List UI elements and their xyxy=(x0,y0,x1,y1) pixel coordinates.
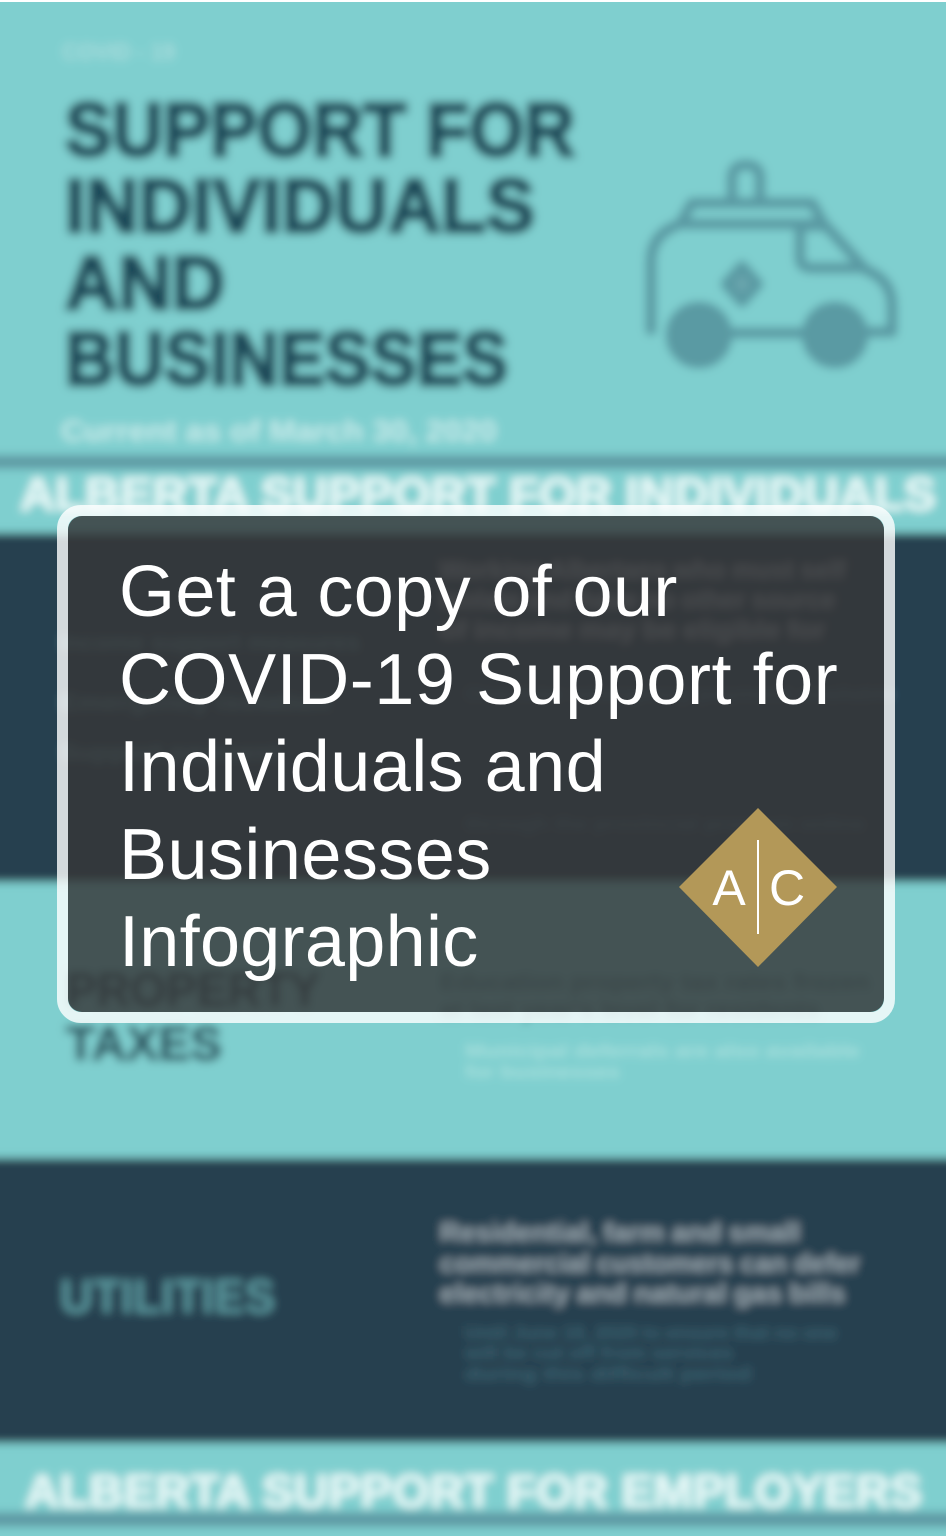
title: AND xyxy=(65,241,225,326)
right column body: isolate and have no other source xyxy=(440,587,835,614)
property taxes body: Education property tax rates frozen xyxy=(440,969,870,996)
property taxes details: Municipal deferrals are also available xyxy=(465,1041,860,1061)
utilities body: commercial customers can defer xyxy=(440,1248,860,1278)
property taxes body xyxy=(440,969,870,1024)
property taxes details xyxy=(465,1041,860,1082)
property taxes details: for businesses xyxy=(465,1062,620,1082)
utilities details: during this difficult period xyxy=(465,1364,751,1384)
utilities label: UTILITIES xyxy=(60,1271,275,1324)
date tag: COVID - 19 xyxy=(62,39,175,66)
left column label xyxy=(60,630,360,765)
property taxes label: PROPERTY xyxy=(66,964,320,1017)
property taxes label xyxy=(66,964,320,1071)
call to action text: COVID-19 Support for xyxy=(119,640,838,720)
call to action text: Businesses xyxy=(119,815,492,895)
right column body: of income may be eligible for xyxy=(440,617,825,644)
panel: navy utilities section xyxy=(0,1158,946,1443)
title: BUSINESSES xyxy=(65,317,508,402)
utilities body xyxy=(440,1217,860,1308)
call to action text: Individuals and xyxy=(119,727,606,807)
right column body xyxy=(440,557,846,644)
right column details: One-time emergency payment available xyxy=(465,684,895,704)
icon: AC gold diamond logo: C xyxy=(769,860,805,916)
icon: AC gold diamond logo: A xyxy=(712,860,746,916)
title: SUPPORT FOR xyxy=(65,88,575,173)
utilities details: Until June 18, 2020 to ensure that no one xyxy=(465,1323,837,1343)
section: property taxes xyxy=(66,964,870,1082)
callout card xyxy=(57,505,895,1023)
right column body: Working Albertans who must self xyxy=(440,557,846,584)
top edge line xyxy=(0,0,946,2)
icon: ambulance xyxy=(651,165,892,363)
left column label: Income support measures xyxy=(60,630,360,655)
utilities body: electricity and natural gas bills xyxy=(440,1278,845,1308)
call to action text xyxy=(119,552,838,982)
right column details xyxy=(465,684,895,834)
subtitle date: Current as of March 30, 2020 xyxy=(61,415,497,448)
heading: Alberta support for individuals: ALBERTA SUPPORT FOR INDIVIDUALS xyxy=(20,468,936,520)
left column label: Support payment xyxy=(60,740,281,765)
footer band rule xyxy=(0,1512,946,1527)
title: INDIVIDUALS xyxy=(65,164,535,249)
utilities body: Residential, farm and small xyxy=(440,1217,800,1247)
property taxes label: TAXES xyxy=(66,1018,222,1071)
call to action text: Get a copy of our xyxy=(119,552,678,632)
panel: navy individuals section xyxy=(0,533,946,882)
utilities details: will be cut off from services xyxy=(464,1343,733,1363)
property taxes body: at last year's level for residents xyxy=(440,997,820,1024)
right column details: through the provincial program online xyxy=(465,814,865,834)
heading: Alberta support for employers: ALBERTA SUPPORT FOR EMPLOYERS xyxy=(25,1465,922,1517)
call to action text: Infographic xyxy=(119,902,479,982)
icon: AC gold diamond logo xyxy=(679,808,837,967)
title xyxy=(65,88,575,402)
utilities details xyxy=(464,1323,837,1384)
left column label: Emergency isolation xyxy=(60,690,330,715)
header band rule xyxy=(0,455,946,469)
